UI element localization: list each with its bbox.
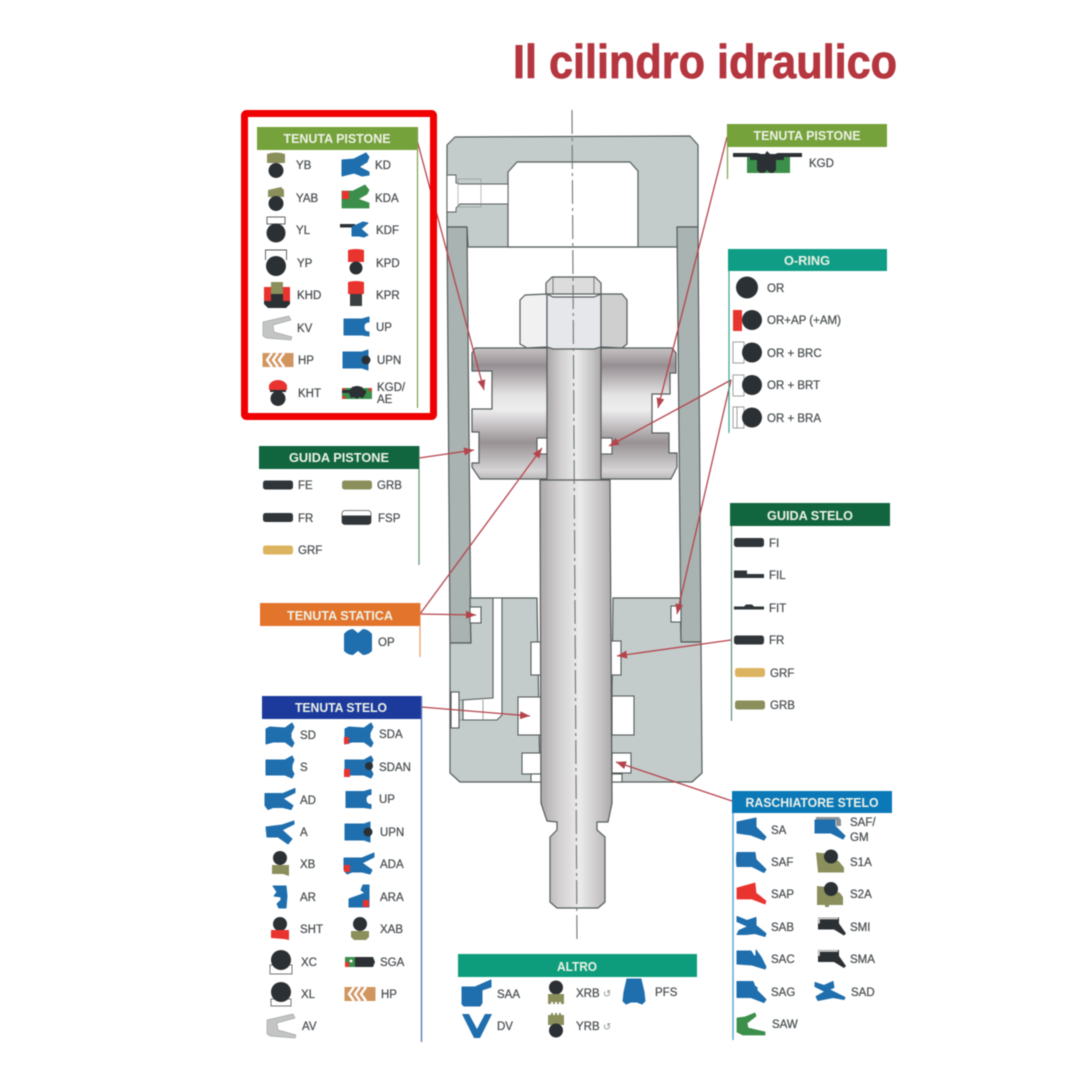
panel: tenuta pistone (left): HP: [298, 355, 314, 367]
panel: guida pistone: FSP: [378, 513, 401, 525]
panel: tenuta stelo: XL: [301, 989, 316, 1001]
panel: guida stelo: FI: [769, 538, 779, 550]
panel: tenuta pistone (left): KGD/: [377, 382, 406, 394]
panel: altro: PFS: [655, 987, 678, 999]
panel: tenuta stelo: AD: [300, 795, 316, 807]
panel: tenuta pistone (left): KV: [297, 323, 313, 335]
panel: tenuta stelo: S: [300, 762, 308, 774]
panel: tenuta pistone (left): YAB: [296, 193, 318, 205]
panel: tenuta statica: OP: [378, 637, 395, 649]
panel: tenuta pistone (left): KHT: [298, 388, 321, 400]
panel: raschiatore stelo: S2A: [850, 889, 872, 901]
panel: tenuta pistone (left): KHD: [297, 290, 321, 302]
panel: raschiatore stelo: GM: [850, 832, 869, 844]
panel: tenuta stelo: XC: [301, 957, 317, 969]
top cap: [447, 136, 698, 247]
panel: o-ring: OR + BRC: [767, 348, 822, 360]
panel: raschiatore stelo: SAF: [771, 857, 793, 869]
piston: [472, 348, 677, 479]
panel: guida stelo: FIL: [769, 570, 786, 582]
panel: guida stelo: [730, 503, 890, 721]
arrows from panels to seal seats: [417, 137, 732, 801]
panel: tenuta pistone (left): [257, 127, 418, 408]
panel: tenuta stelo: A: [300, 827, 308, 839]
panel: tenuta stelo: SDA: [379, 729, 403, 741]
panel: tenuta stelo: XB: [300, 859, 316, 871]
panel: tenuta pistone (left): KPD: [376, 258, 400, 270]
panel: raschiatore stelo: SAD: [851, 987, 875, 999]
panel: tenuta pistone (left): TENUTA PISTONE: [284, 132, 390, 146]
panel: tenuta pistone (left): KDF: [376, 225, 399, 237]
panel: tenuta pistone (right): KGD: [809, 158, 834, 170]
panel: o-ring: OR+AP (+AM): [767, 315, 841, 327]
panel: tenuta pistone (left): UP: [376, 322, 392, 334]
panel: guida stelo: GUIDA STELO: [767, 509, 853, 523]
hex nut: [520, 277, 627, 349]
panel: tenuta stelo: ADA: [380, 859, 404, 871]
cylinder cross-section diagram: [417, 110, 732, 942]
panel: raschiatore stelo: SAF/: [850, 817, 876, 829]
panel: o-ring: OR + BRA: [767, 413, 821, 425]
panel: tenuta pistone (left): UPN: [377, 355, 401, 367]
panel: tenuta pistone (right): TENUTA PISTONE: [754, 129, 860, 143]
panel: raschiatore stelo: SMA: [850, 954, 875, 966]
panel: altro: [458, 954, 697, 1038]
panel: tenuta statica: TENUTA STATICA: [287, 609, 393, 623]
panel: tenuta pistone (left): YB: [296, 160, 312, 172]
panel: raschiatore stelo: SMI: [850, 922, 870, 934]
panel: altro: ALTRO: [557, 960, 597, 974]
panel: tenuta statica: [260, 603, 420, 657]
panel: o-ring: OR + BRT: [767, 380, 820, 392]
cylinder tube walls: [447, 227, 701, 643]
panel: tenuta stelo: UPN: [380, 827, 404, 839]
panel: altro: SAA: [497, 989, 520, 1001]
panel: raschiatore stelo: SAW: [772, 1019, 798, 1031]
panel: tenuta pistone (left): AE: [377, 394, 393, 406]
panel: o-ring: O-RING: [784, 254, 830, 268]
axis centre line: [572, 110, 577, 942]
panel: raschiatore stelo: SAC: [771, 954, 795, 966]
panel: raschiatore stelo: [732, 791, 892, 1040]
panel: guida stelo: GRF: [770, 668, 794, 680]
panel: tenuta pistone (left): KD: [375, 160, 391, 172]
panel: raschiatore stelo: SAP: [771, 889, 794, 901]
panel: guida stelo: GRB: [770, 700, 795, 712]
panel: guida pistone: GRF: [298, 545, 322, 557]
panel: tenuta stelo: SDAN: [379, 762, 411, 774]
panel: tenuta stelo: TENUTA STELO: [295, 701, 387, 715]
panel: tenuta pistone (left): KPR: [376, 290, 400, 302]
panel: tenuta stelo: HP: [381, 989, 397, 1001]
panel: tenuta pistone (left): YP: [297, 258, 313, 270]
panel: raschiatore stelo: SAG: [771, 987, 795, 999]
panel: tenuta stelo: ARA: [380, 892, 404, 904]
panel: tenuta pistone (left): KDA: [375, 193, 399, 205]
panel: tenuta stelo: AV: [302, 1021, 317, 1033]
panel: guida stelo: FIT: [769, 603, 786, 615]
panel: tenuta pistone (left): YL: [296, 225, 311, 237]
red highlight frame: [244, 114, 434, 416]
piston rod: [540, 345, 612, 908]
panel: tenuta stelo: XAB: [380, 924, 403, 936]
panel: tenuta stelo: SD: [300, 730, 316, 742]
bottom head: [450, 598, 702, 782]
panel: o-ring: OR: [767, 283, 784, 295]
panel: tenuta stelo: AR: [300, 892, 316, 904]
panel: guida stelo: FR: [769, 635, 784, 647]
panel: raschiatore stelo: S1A: [850, 857, 872, 869]
panel: raschiatore stelo: RASCHIATORE STELO: [746, 796, 879, 810]
panel: guida pistone: FR: [298, 513, 313, 525]
panel: guida pistone: GRB: [377, 480, 402, 492]
panel: raschiatore stelo: SAB: [771, 922, 794, 934]
panel: altro: XRB ↺: [576, 988, 611, 1000]
panel: tenuta stelo: SGA: [380, 957, 405, 969]
panel: altro: DV: [497, 1021, 513, 1033]
panel: tenuta stelo: SHT: [300, 924, 323, 936]
panel: tenuta pistone (right): [727, 124, 887, 179]
panel: guida pistone: GUIDA PISTONE: [289, 451, 389, 465]
panel: raschiatore stelo: SA: [771, 825, 787, 837]
panel: tenuta stelo: [262, 696, 422, 1042]
panel: tenuta stelo: UP: [379, 794, 395, 806]
panel: o-ring: [728, 249, 887, 433]
title: Il cilindro idraulico: [513, 35, 897, 88]
panel: altro: YRB ↺: [576, 1021, 611, 1033]
panel: guida pistone: [259, 446, 419, 565]
panel: guida pistone: FE: [298, 480, 313, 492]
